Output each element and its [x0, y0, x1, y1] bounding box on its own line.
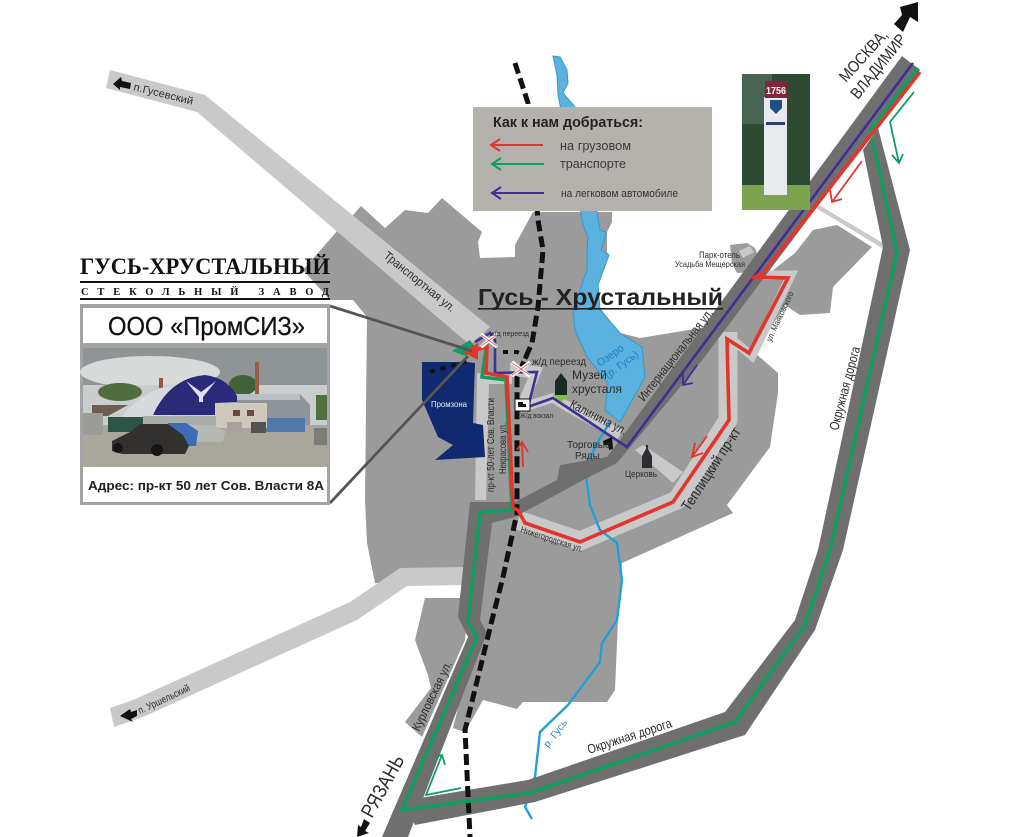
label: Vladimir: ВЛАДИМИР — [848, 31, 910, 103]
green truck route — [402, 68, 918, 810]
icon: railway crossing top — [481, 334, 497, 347]
main highway, dark grey — [382, 56, 920, 837]
label: Moscow: МОСКВА, — [836, 27, 892, 86]
railway spur, dotted — [503, 352, 528, 358]
stele caption — [766, 122, 785, 125]
company card — [80, 304, 330, 505]
grey warehouse — [237, 394, 310, 425]
label: crystal museum: Музей — [572, 368, 607, 382]
label: Internatsionalnaya: Интернациональная ул. — [635, 306, 716, 404]
stele year: 1756 — [766, 85, 786, 97]
lake — [553, 56, 645, 422]
company photo — [80, 348, 327, 467]
logo subtitle: СТЕКОЛЬНЫЙ ЗАВОД — [81, 286, 330, 298]
light secondary roads — [106, 70, 888, 727]
dark car — [112, 424, 189, 454]
silver car — [188, 425, 225, 442]
far cars — [227, 422, 242, 433]
label: 50 let Sov Vlasti: пр-кт 50-лет Сов. Власти — [485, 398, 497, 492]
label: shopping rows: Ряды — [575, 451, 600, 462]
label: Nekrasova: Некрасова ул. — [498, 423, 509, 474]
title: city name: Гусь - Хрустальный — [478, 284, 723, 310]
purple dome building — [153, 375, 240, 415]
label: ring road right: Окружная дорога — [826, 344, 863, 432]
legend arrow: green — [492, 158, 544, 170]
green destination marker — [452, 340, 477, 356]
icon: railway station — [515, 399, 530, 411]
red destination marker — [463, 343, 478, 360]
direction arrow: red, Teplitsky — [692, 436, 707, 457]
label: church: Церковь — [625, 469, 657, 479]
icon: arrow to Ryazan — [357, 819, 370, 837]
legend heading: Как к нам добраться: — [493, 114, 643, 131]
trees — [98, 383, 142, 401]
icon: arrow to Urshelsky — [120, 709, 137, 722]
photo: city stele 1756 — [742, 74, 810, 210]
legend panel — [473, 107, 712, 211]
icon: arrow to Moscow — [894, 2, 918, 32]
direction arrow: red, highway — [830, 161, 862, 202]
chimney — [255, 362, 259, 394]
direction arrow: green, ring road — [890, 92, 914, 163]
direction arrow: green, bottom — [426, 755, 461, 795]
callout leader lines — [330, 306, 472, 503]
purple car route — [475, 63, 913, 447]
blue fence — [260, 418, 305, 432]
label: shopping rows: Торговые — [567, 440, 611, 451]
label: Kurlovskaya: Курловская ул. — [409, 659, 455, 733]
company logo — [80, 254, 330, 300]
legend text: truck line two: транспорте — [560, 156, 626, 171]
legend text: truck line one: на грузовом — [560, 138, 631, 153]
ring road, dark grey — [403, 128, 910, 825]
legend text: car: на легковом автомобиле — [561, 188, 678, 200]
label: crossing top: ж/д переезд — [490, 329, 530, 338]
label: Nizhegorodskaya: Нижегородская ул. — [519, 524, 584, 554]
label: promzona: Промзона — [431, 399, 467, 409]
label: Gusevsky: п.Гусевский — [132, 81, 195, 108]
stele top plate — [765, 81, 787, 98]
label: Usadba Meshcherskaya: Усадьба Мещерская — [675, 259, 745, 269]
blue car — [166, 423, 198, 446]
label: station: Ж/д вокзал — [520, 411, 553, 420]
icon: railway crossing middle — [512, 362, 530, 376]
legend arrow: purple — [492, 187, 544, 199]
label: park hotel: Парк-отель — [699, 250, 740, 261]
icon: church — [642, 445, 652, 468]
icon: shopping rows marker — [603, 437, 613, 450]
label: crossing middle: ж/д переезд — [532, 356, 586, 368]
direction arrow: purple, highway — [683, 365, 697, 385]
label: Mayakovskogo: ул. Маяковского — [764, 289, 796, 343]
dome emblem — [186, 381, 216, 402]
promzona block — [422, 362, 485, 460]
green fence — [108, 417, 143, 432]
label: lake line two: (р. Гусь) — [603, 348, 641, 381]
label: Urshelsky: п. Уршельский — [137, 683, 192, 717]
light guard building — [216, 403, 267, 428]
logo wordmark: ГУСЬ-ХРУСТАЛЬНЫЙ — [80, 254, 330, 279]
legend arrow: red — [491, 139, 543, 151]
label: lake line one: Озеро — [595, 342, 626, 369]
label: ring road bottom: Окружная дорога — [585, 715, 674, 757]
icon: crystal museum — [553, 373, 570, 402]
stele pillar — [764, 97, 787, 195]
direction arrow: red, Nekrasova — [517, 442, 528, 467]
company name: ООО «ПромСИЗ» — [108, 311, 305, 341]
label: Transportnaya: Транспортная ул. — [381, 248, 458, 315]
railway line, dashed — [465, 63, 543, 837]
river Gus — [525, 422, 622, 819]
address: Адрес: пр-кт 50 лет Сов. Власти 8А — [88, 478, 325, 493]
red truck route — [475, 72, 920, 542]
stele emblem — [770, 100, 782, 114]
icon: arrow to Gusevsky — [113, 77, 131, 90]
label: Teplitsky: Теплицкий пр-кт — [678, 424, 745, 514]
city area: Gus-Khrustalny town blocks — [303, 198, 872, 737]
label: river Gus: р. Гусь — [542, 718, 570, 750]
light hangar — [122, 385, 172, 417]
label: crystal museum: хрусталя — [572, 382, 622, 396]
promzona rail dots — [430, 361, 468, 372]
label: Ryazan: РЯЗАНЬ — [357, 751, 409, 821]
label: Kalinina: Калинина ул. — [568, 397, 629, 438]
